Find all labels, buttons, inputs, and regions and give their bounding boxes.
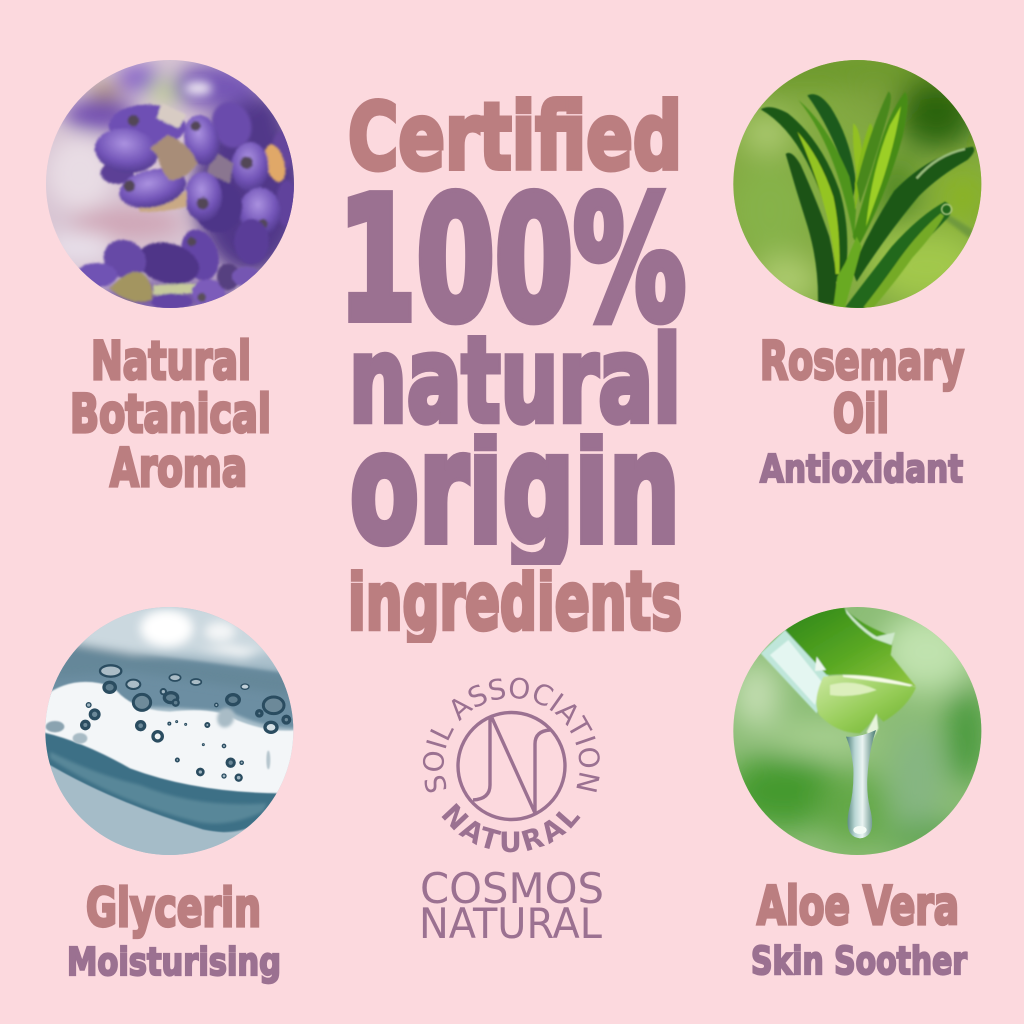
logo text: COSMOS NATURAL: COSMOS — [420, 864, 604, 913]
label: Natural Botanical Aroma: Natural — [91, 331, 251, 392]
heading: Certified: Certified — [348, 84, 682, 190]
logo: Soil Association Natural — [422, 678, 600, 852]
photo: aloe vera — [727, 605, 987, 858]
logo text: COSMOS NATURAL: NATURAL — [419, 899, 603, 948]
logo: Soil Association Natural: NATURAL — [442, 803, 580, 852]
label: Aloe Vera Skin Soother — [751, 876, 967, 983]
bubbles — [82, 665, 290, 781]
label: Glycerin Moisturising — [67, 878, 281, 984]
label: Natural Botanical Aroma: Botanical — [70, 384, 271, 445]
label: Rosemary Oil Antioxidant: Oil — [833, 384, 889, 445]
heading: natural: natural — [349, 311, 681, 449]
label: Natural Botanical Aroma — [70, 331, 271, 499]
label: Natural Botanical Aroma: Aroma — [110, 438, 247, 499]
photo: glycerin gel — [43, 605, 297, 862]
logo text: COSMOS NATURAL — [419, 864, 604, 948]
heading: ingredients: ingredients — [348, 555, 682, 648]
aloe drop — [846, 730, 876, 838]
heading: origin: origin — [350, 400, 680, 577]
label: Rosemary Oil Antioxidant — [760, 331, 964, 491]
heading: 100%: 100% — [338, 162, 686, 360]
lavender buds — [76, 103, 289, 310]
photo: rosemary — [733, 60, 982, 308]
rosemary leaves — [761, 92, 974, 309]
label: Rosemary Oil Antioxidant: Antioxidant — [760, 447, 963, 491]
label: Glycerin Moisturising: Glycerin — [86, 878, 261, 939]
label: Aloe Vera Skin Soother: Skin Soother — [751, 939, 967, 983]
photo: lavender — [43, 57, 307, 313]
logo: Soil Association Natural: SOIL ASSOCIATION — [422, 678, 600, 792]
label: Glycerin Moisturising: Moisturising — [67, 940, 281, 984]
